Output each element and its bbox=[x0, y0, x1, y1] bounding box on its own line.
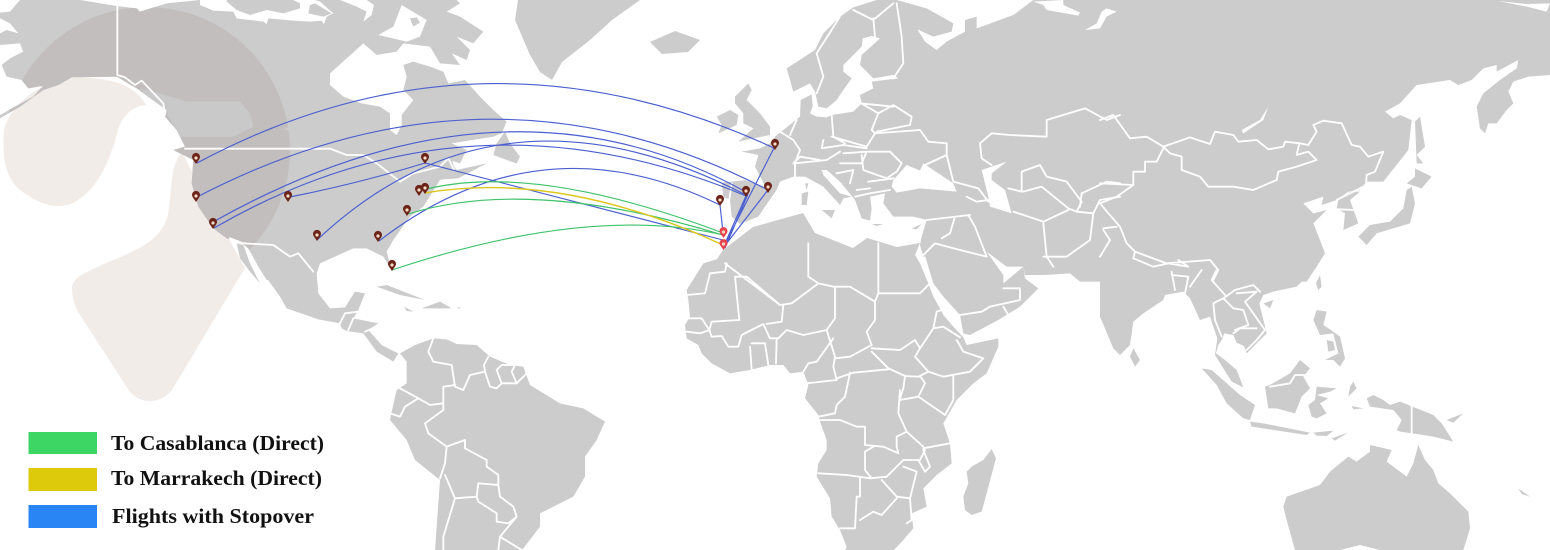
pin: Dallas bbox=[313, 230, 321, 241]
pin: Paris bbox=[771, 139, 779, 150]
borders: Russia, China and Mongolia bbox=[1100, 115, 1383, 280]
flight routes bbox=[197, 84, 774, 270]
legend item: To Casablanca bbox=[28, 431, 324, 455]
pin: Washington bbox=[403, 205, 411, 216]
pin: Los Angeles bbox=[209, 218, 217, 229]
routes: direct to Marrakech bbox=[425, 188, 723, 245]
land: Greenland bbox=[515, 0, 640, 80]
legend item: To Marrakech bbox=[28, 466, 322, 491]
borders: South America bbox=[390, 338, 527, 550]
pin: Miami bbox=[388, 260, 396, 271]
pale ocean highlight shapes bbox=[4, 78, 245, 401]
pin: Barcelona bbox=[764, 182, 772, 193]
borders: South and Southeast Asia bbox=[1172, 270, 1412, 437]
land: Europe, western Russia and Middle East bbox=[717, 0, 1123, 282]
legend bbox=[28, 431, 324, 528]
borders: Europe and Central Asia bbox=[729, 3, 1120, 267]
land: South America and Caribbean bbox=[377, 285, 605, 550]
borders: North America bbox=[117, 0, 165, 115]
overlay: highlight circle over North America bbox=[9, 7, 290, 250]
legend item: Flights with Stopover bbox=[28, 504, 314, 528]
routes: stopover flights bbox=[197, 84, 774, 248]
legend item: To Marrakech: To Marrakech (Direct) bbox=[111, 466, 322, 490]
pin: New York bbox=[415, 185, 423, 196]
pin: Boston bbox=[421, 183, 429, 194]
land: Africa and Arabia bbox=[700, 213, 930, 320]
land: Northern and East Asia bbox=[1100, 0, 1550, 282]
pin: Lisbon bbox=[716, 195, 724, 206]
pin: San Francisco bbox=[192, 191, 200, 202]
legend item: Flights with Stopover: Flights with Stopover bbox=[112, 504, 314, 528]
pin: Marrakech bbox=[720, 239, 727, 250]
map: world land masses bbox=[377, 0, 1550, 550]
legend item: To Casablanca: To Casablanca (Direct) bbox=[111, 431, 324, 455]
pin: Toronto bbox=[421, 153, 429, 164]
map: inland seas bbox=[892, 0, 1550, 213]
routes: direct to Casablanca bbox=[392, 182, 723, 270]
map: Arctic channels and islands bbox=[200, 0, 427, 42]
pin: Denver bbox=[284, 191, 292, 202]
pin: Casablanca bbox=[720, 227, 727, 238]
land: Iceland bbox=[650, 31, 700, 54]
land: South and Southeast Asia, Oceania bbox=[1100, 268, 1530, 550]
map: North American land bbox=[0, 0, 520, 362]
origin and stopover pins bbox=[192, 139, 779, 271]
pin centres bbox=[194, 142, 777, 267]
pin: Atlanta bbox=[374, 231, 382, 242]
pin: Madrid bbox=[742, 186, 750, 197]
pin: Seattle bbox=[192, 153, 200, 164]
borders: Africa and Arabia bbox=[687, 243, 1020, 528]
